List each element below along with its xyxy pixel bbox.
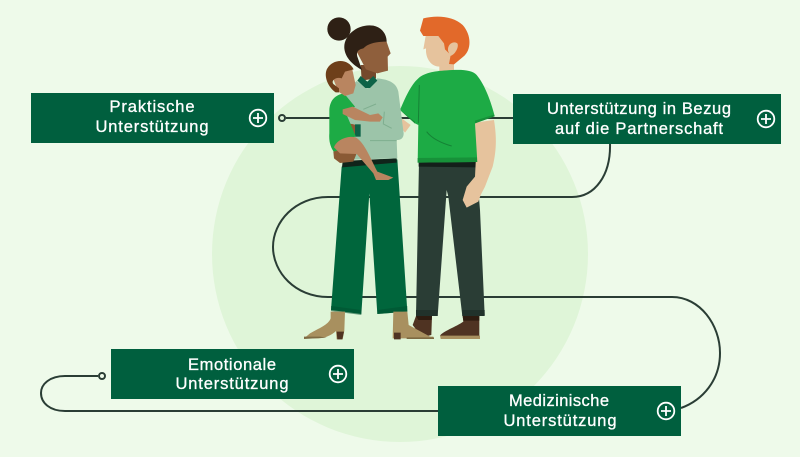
- child: [326, 61, 393, 180]
- box: Medizinische Unterstützung: [438, 386, 681, 436]
- box: Praktische Unterstützung: [31, 93, 274, 143]
- box: Unterstützung in Bezug auf die Partnerschaft: [513, 94, 781, 144]
- icon: plus: [658, 403, 674, 419]
- box: Emotionale Unterstützung: Unterstützung: [176, 375, 288, 393]
- family illustration: [304, 17, 496, 339]
- icon: plus: [758, 111, 774, 127]
- connector path: [41, 115, 720, 411]
- box: Unterstützung in Bezug auf die Partnerschaft: Unterstützung in Bezug: [547, 100, 731, 118]
- box: Unterstützung in Bezug auf die Partnerschaft: auf die Partnerschaft: [555, 120, 723, 138]
- man: [400, 17, 496, 339]
- box: Praktische Unterstützung: Praktische: [110, 98, 194, 116]
- box: Medizinische Unterstützung: Medizinische: [509, 392, 609, 410]
- box: Medizinische Unterstützung: Unterstützung: [504, 412, 616, 430]
- icon: plus: [250, 110, 266, 126]
- box: Emotionale Unterstützung: [111, 349, 354, 399]
- icon: plus: [330, 366, 346, 382]
- background circle: [212, 66, 588, 442]
- woman: [304, 17, 434, 339]
- box: Praktische Unterstützung: Unterstützung: [96, 118, 208, 136]
- box: Emotionale Unterstützung: Emotionale: [188, 356, 276, 374]
